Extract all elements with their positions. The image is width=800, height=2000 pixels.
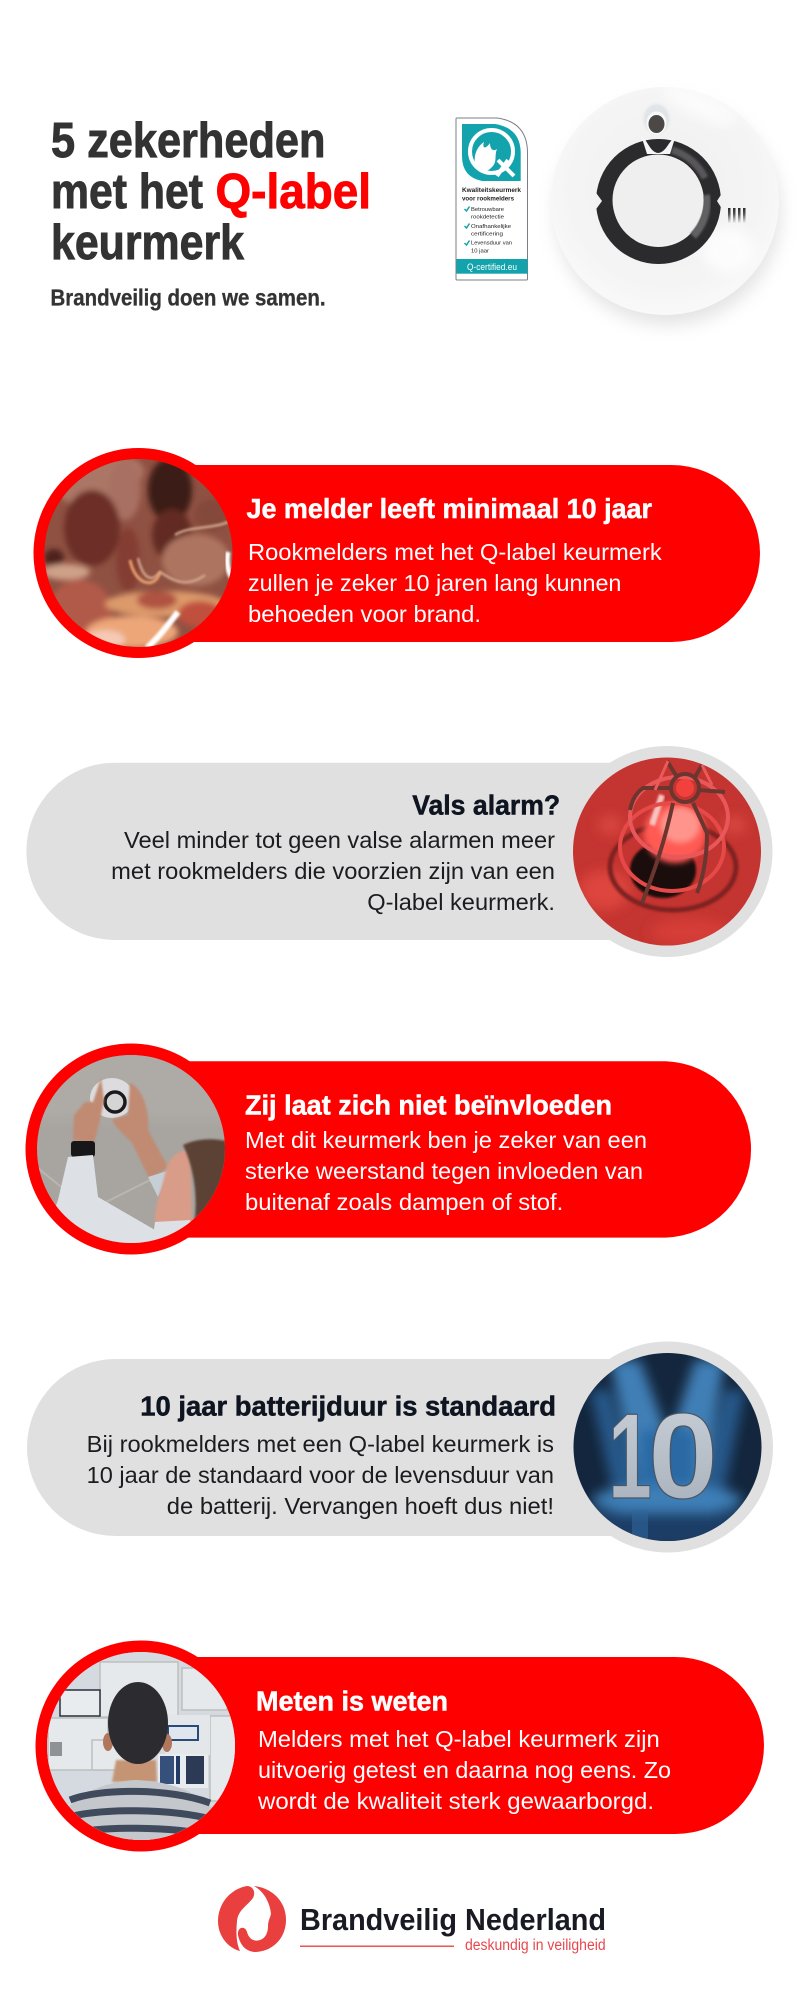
- icon: vent holes: [728, 208, 746, 223]
- photo: number ten spotlight: [562, 1342, 773, 1552]
- teal url bar: [456, 259, 528, 274]
- tagline: deskundig in veiligheid: [465, 1937, 606, 1954]
- panel: batterijduur: [27, 1342, 773, 1552]
- number ten: 1: [608, 1388, 652, 1524]
- tagline rule: [300, 1946, 454, 1947]
- badge text: voor rookmelders: [462, 196, 515, 202]
- Q-label badge: [456, 118, 528, 280]
- pill background: [135, 1061, 751, 1238]
- icon: led lens: [644, 104, 670, 134]
- title: 5 zekerheden: [51, 114, 326, 168]
- heading: 10 jaar batterijduur is standaard: [140, 1391, 556, 1422]
- body text: uitvoerig getest en daarna nog eens. Zo: [258, 1757, 671, 1783]
- heading: Zij laat zich niet beïnvloeden: [245, 1089, 612, 1120]
- body text: buitenaf zoals dampen of stof.: [245, 1189, 563, 1215]
- panel: vals alarm: [26, 746, 772, 957]
- pill background: [140, 465, 760, 642]
- panel: niet beinvloeden: [26, 1044, 751, 1254]
- body text: [245, 1127, 647, 1215]
- body text: sterke weerstand tegen invloeden van: [245, 1158, 643, 1184]
- body text: Q-label keurmerk.: [367, 889, 555, 915]
- badge text: Kwaliteitskeurmerk: [462, 187, 522, 194]
- smoke detector: [551, 77, 780, 324]
- body text: Bij rookmelders met een Q-label keurmerk is: [87, 1431, 554, 1457]
- detector ring: [594, 135, 724, 256]
- body text: behoeden voor brand.: [248, 601, 481, 627]
- badge text: Onafhankelijke: [471, 224, 511, 230]
- body text: [111, 827, 555, 915]
- photo: red alarm beacon: [562, 746, 772, 957]
- panel: meten is weten: [36, 1640, 764, 1852]
- number ten: 0: [648, 1388, 718, 1524]
- icon: check marks: [464, 206, 470, 245]
- badge text: rookdetectie: [471, 215, 504, 221]
- number ten: [612, 1412, 714, 1500]
- photo: man installing detector: [26, 1044, 236, 1254]
- pill background: [145, 1657, 764, 1834]
- body text: wordt de kwaliteit sterk gewaarborgd.: [257, 1788, 654, 1814]
- badge text: [462, 187, 522, 254]
- body text: Rookmelders met het Q-label keurmerk: [248, 539, 662, 565]
- body text: de batterij. Vervangen hoeft dus niet!: [167, 1493, 554, 1519]
- photo: fire and smoke: [34, 447, 244, 658]
- teal url bar: Q-certified.eu: [467, 262, 517, 273]
- pill background: [27, 1359, 670, 1536]
- badge text: Betrouwbare: [471, 207, 504, 213]
- wordmark: Brandveilig Nederland: [300, 1902, 606, 1937]
- body text: Veel minder tot geen valse alarmen meer: [124, 827, 555, 853]
- body text: [248, 539, 662, 627]
- body text: [257, 1726, 671, 1814]
- panel: minimaal 10 jaar: [34, 447, 760, 658]
- heading: Vals alarm?: [412, 789, 560, 820]
- title: keurmerk: [51, 216, 245, 270]
- icon: flame swirl mark: [218, 1886, 286, 1952]
- body text: Melders met het Q-label keurmerk zijn: [258, 1726, 660, 1752]
- body text: 10 jaar de standaard voor de levensduur van: [87, 1462, 554, 1488]
- body text: [87, 1431, 554, 1519]
- subtitle: Brandveilig doen we samen.: [50, 284, 326, 310]
- body text: zullen je zeker 10 jaren lang kunnen: [248, 570, 621, 596]
- body text: Met dit keurmerk ben je zeker van een: [245, 1127, 647, 1153]
- badge text: Levensduur van: [471, 241, 512, 247]
- detector in photo: [90, 1078, 134, 1118]
- photo: man at wall of papers: [36, 1640, 246, 1852]
- title: Q-label: [216, 165, 371, 219]
- heading: Je melder leeft minimaal 10 jaar: [246, 493, 652, 524]
- badge text: 10 jaar: [471, 248, 489, 254]
- title: [51, 114, 371, 270]
- pill background: [26, 763, 670, 940]
- heading: Meten is weten: [256, 1686, 448, 1716]
- icon: Q logo: [462, 124, 521, 181]
- body text: met rookmelders die voorzien zijn van een: [111, 858, 555, 884]
- title: met het: [51, 165, 203, 219]
- logo: Brandveilig Nederland: [218, 1886, 606, 1954]
- badge text: certificering: [471, 232, 503, 238]
